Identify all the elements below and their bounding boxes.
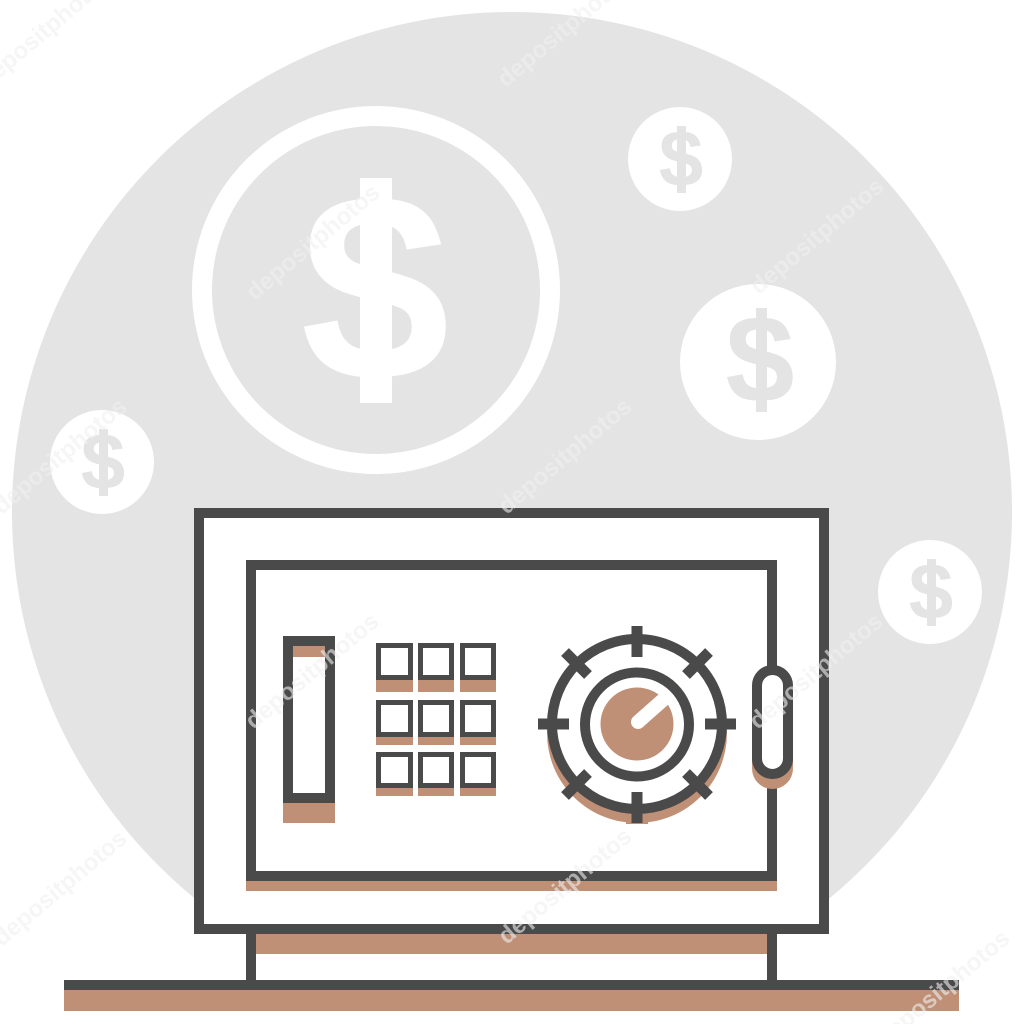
- combination dial: [538, 626, 736, 824]
- door latch: [752, 670, 793, 789]
- watermarks: depositphotos: [493, 823, 637, 950]
- coin: far right: [878, 540, 982, 644]
- watermarks: depositphotos: [240, 608, 384, 735]
- safe body: [199, 513, 824, 929]
- coin: middle right: $: [726, 291, 794, 429]
- watermarks: depositphotos: [241, 179, 385, 306]
- keypad: [376, 646, 496, 796]
- watermarks: depositphotos: [493, 393, 637, 520]
- safe door: [246, 565, 777, 891]
- safe feet: [246, 930, 777, 982]
- ground line: [64, 980, 959, 1011]
- watermarks: depositphotos: [744, 608, 888, 735]
- large coin: $: [300, 137, 450, 437]
- coin: left: [50, 410, 154, 514]
- coin: top right: [628, 107, 732, 211]
- coin: left: $: [81, 417, 125, 506]
- watermarks: depositphotos: [745, 173, 889, 300]
- large coin: [202, 116, 550, 464]
- coin: top right: $: [659, 114, 703, 203]
- coin: far right: $: [909, 547, 953, 636]
- coin: middle right: [680, 284, 836, 440]
- door handle: [283, 641, 335, 823]
